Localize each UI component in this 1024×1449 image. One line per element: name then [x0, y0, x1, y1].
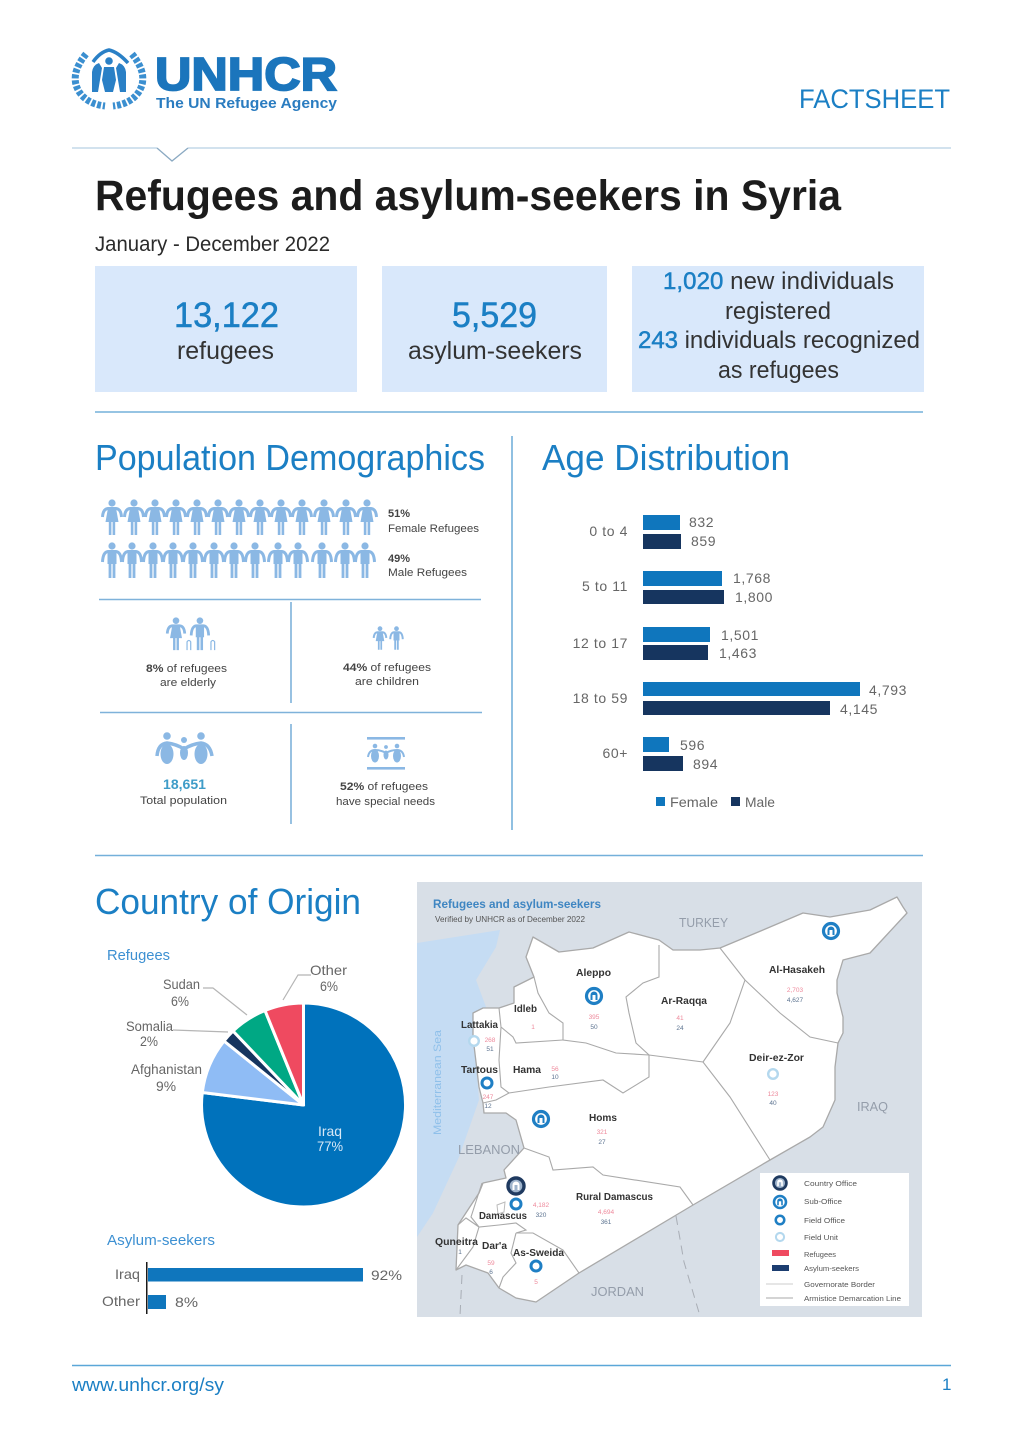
chart legend: Male	[745, 794, 775, 810]
footer url: www.unhcr.org/sy	[71, 1375, 224, 1395]
map: country labels	[432, 915, 888, 1299]
bar chart: age groups: 1,768	[733, 570, 771, 586]
pie chart: refugees by origin: 9%	[156, 1078, 176, 1094]
special needs share	[336, 781, 436, 808]
map land: Syria	[456, 897, 907, 1302]
map: governorate figures: 50	[590, 1024, 598, 1031]
map: governorate labels: Rural Damascus	[576, 1192, 653, 1203]
bar chart: age groups: 0 to 4	[589, 523, 628, 539]
map: country labels: JORDAN	[591, 1284, 644, 1299]
map legend: Sub-Office	[804, 1197, 842, 1206]
bar chart: age groups: 1,463	[719, 645, 757, 661]
map: governorate figures: 268	[485, 1037, 496, 1044]
map: governorate labels: Al-Hasakeh	[769, 965, 825, 976]
map: governorate figures: 361	[601, 1219, 612, 1226]
map: governorate figures: 4,627	[787, 997, 804, 1004]
map: governorate figures: 41	[676, 1015, 684, 1022]
bar chart: age groups: 4,793	[869, 682, 907, 698]
panel: registrations and recognitions: as refugees	[718, 357, 839, 384]
icon: children	[374, 626, 403, 650]
map: governorate figures: 247	[483, 1094, 494, 1101]
map: governorate figures: 1	[531, 1024, 535, 1031]
map: governorate figures: 51	[486, 1046, 494, 1053]
elderly share	[146, 663, 228, 689]
icon: family	[157, 732, 212, 764]
map: office markers	[469, 924, 838, 1271]
map: governorate labels: Damascus	[479, 1211, 527, 1222]
map legend: Field Unit	[804, 1233, 839, 1242]
bar chart: age groups: 12 to 17	[573, 635, 628, 651]
bar chart: age groups: 60+	[602, 745, 628, 761]
elderly share: are elderly	[160, 677, 217, 689]
bar chart: asylum-seekers by origin: Other	[102, 1293, 140, 1309]
heading: population demographics: Population Demographics	[95, 437, 485, 478]
map: governorate labels: Quneitra	[435, 1237, 478, 1248]
map title: Verified by UNHCR as of December 2022	[435, 914, 585, 924]
pie chart: refugees by origin: 6%	[320, 978, 338, 994]
map: governorate figures: 4,182	[533, 1202, 550, 1209]
map: governorate figures: 395	[589, 1014, 600, 1021]
map: governorate figures: 12	[484, 1103, 492, 1110]
total population: Total population	[140, 795, 227, 807]
bar chart: asylum-seekers by origin: 92%	[371, 1267, 402, 1283]
bar chart: asylum-seekers by origin: Iraq	[115, 1266, 140, 1282]
special needs share: 52% of refugees	[340, 781, 429, 793]
map: governorate labels	[435, 965, 825, 1259]
elderly share: 8% of refugees	[146, 663, 228, 675]
map sea	[417, 930, 500, 1237]
bar chart: age groups: 832	[689, 514, 714, 530]
icon: UNHCR emblem	[75, 50, 143, 106]
total population	[140, 776, 227, 807]
bar chart: age groups: 1,501	[721, 627, 759, 643]
total population: 18,651	[163, 776, 206, 792]
map: governorate figures: 27	[598, 1139, 606, 1146]
subheading: asylum-seekers: Asylum-seekers	[107, 1233, 215, 1249]
male share: Male Refugees	[388, 567, 468, 579]
pie chart: refugees by origin: Iraq	[318, 1123, 342, 1139]
bar chart: age groups	[573, 514, 907, 772]
title: Refugees and asylum-seekers in Syria	[95, 172, 842, 220]
icons: female refugees row	[102, 499, 376, 535]
logo wordmark: UNHCR	[155, 48, 337, 100]
pie chart: refugees by origin: Afghanistan	[131, 1061, 202, 1077]
panel: registrations and recognitions: registered	[725, 298, 831, 325]
bar chart: age groups: 859	[691, 533, 716, 549]
map: governorate figures: 4,694	[598, 1209, 615, 1216]
map: country labels: Mediterranean Sea	[432, 1029, 444, 1135]
panel: refugees count: refugees	[177, 337, 274, 365]
map: governorate figures: 321	[597, 1129, 608, 1136]
map: governorate labels: As-Sweida	[513, 1248, 564, 1259]
bar chart: age groups: 596	[680, 737, 705, 753]
footer	[71, 1366, 951, 1395]
icon: elderly	[167, 617, 215, 650]
children share	[343, 662, 432, 688]
map: country labels: LEBANON	[458, 1142, 520, 1157]
bar chart: asylum-seekers by origin: 8%	[175, 1294, 198, 1310]
map: governorate labels: Idleb	[514, 1004, 537, 1015]
pie chart: refugees by origin: 6%	[171, 993, 189, 1009]
page number: 1	[942, 1375, 951, 1394]
map: governorate labels: Ar-Raqqa	[661, 996, 707, 1007]
panel: country of origin	[95, 881, 406, 1314]
bar chart: age groups: 1,800	[735, 589, 773, 605]
header with logo and factsheet label	[72, 48, 951, 161]
map: governorate figures: 59	[487, 1260, 495, 1267]
map: governorate labels: Dar'a	[482, 1241, 507, 1252]
pie chart: refugees by origin: Sudan	[163, 976, 200, 992]
icons: male refugees row	[102, 542, 374, 578]
map: governorate figures: 24	[676, 1025, 684, 1032]
male share: 49%	[388, 553, 410, 565]
map legend: Refugees	[804, 1250, 836, 1259]
male share	[388, 553, 468, 579]
map legend: Governorate Border	[804, 1280, 876, 1289]
map: governorate figures: 5	[534, 1279, 538, 1286]
subheading: refugees: Refugees	[107, 948, 170, 964]
children share: are children	[355, 676, 419, 688]
map: governorate figures: 320	[536, 1212, 547, 1219]
female share	[388, 508, 480, 535]
panel: asylum-seekers count: 5,529	[452, 296, 537, 335]
map legend: Asylum-seekers	[804, 1264, 859, 1273]
pie chart: refugees by origin: 2%	[140, 1033, 158, 1049]
icon: special needs	[367, 737, 405, 770]
map legend: Field Office	[804, 1216, 845, 1225]
map: governorate figures	[458, 987, 804, 1286]
panel: population demographics	[95, 437, 485, 824]
chart legend: Female	[670, 794, 718, 810]
bar chart: age groups: 5 to 11	[582, 578, 628, 594]
map: country labels: TURKEY	[679, 915, 728, 930]
female share: 51%	[388, 508, 410, 520]
map title	[433, 897, 601, 924]
bar chart: age groups: 894	[693, 756, 718, 772]
map: governorate figures: 6	[489, 1269, 493, 1276]
factsheet label: FACTSHEET	[799, 84, 950, 114]
map: governorate labels: Hama	[513, 1065, 541, 1076]
map: governorate labels: Lattakia	[461, 1020, 498, 1031]
panel: refugees count	[95, 266, 357, 392]
map: governorate figures: 1	[458, 1249, 462, 1256]
map: governorate figures: 40	[769, 1100, 777, 1107]
map: governorate figures: 2,703	[787, 987, 804, 994]
special needs share: have special needs	[336, 796, 436, 808]
map: governorate labels: Homs	[589, 1113, 617, 1124]
female share: Female Refugees	[388, 523, 480, 535]
map: governorate figures: 10	[551, 1074, 559, 1081]
panel: registrations and recognitions: 1,020 new individuals	[663, 268, 894, 295]
heading: age distribution: Age Distribution	[542, 437, 790, 478]
bar chart: age groups: 4,145	[840, 701, 878, 717]
map: governorate figures: 56	[551, 1066, 559, 1073]
bar chart: age groups: 18 to 59	[573, 690, 628, 706]
map: refugees and asylum-seekers by governorate	[417, 882, 922, 1317]
panel: asylum-seekers count: asylum-seekers	[408, 337, 582, 365]
pie chart: refugees by origin: 77%	[317, 1138, 343, 1154]
map: governorate labels: Aleppo	[576, 968, 611, 979]
pie chart: refugees by origin: Other	[310, 962, 347, 978]
heading: country of origin: Country of Origin	[95, 881, 361, 922]
pie chart: refugees by origin: Somalia	[126, 1018, 173, 1034]
logo tagline: The UN Refugee Agency	[156, 95, 338, 112]
children share: 44% of refugees	[343, 662, 432, 674]
panel: asylum-seekers count	[382, 266, 607, 392]
map title: Refugees and asylum-seekers	[433, 897, 601, 911]
map: governorate figures: 123	[768, 1091, 779, 1098]
chart legend	[656, 794, 775, 810]
panel: registrations and recognitions	[632, 266, 924, 392]
map: governorate labels: Tartous	[461, 1065, 498, 1076]
panel: refugees count: 13,122	[174, 296, 279, 335]
map: governorate labels: Deir-ez-Zor	[749, 1053, 804, 1064]
pie chart: refugees by origin	[126, 962, 406, 1207]
panel: age distribution	[542, 437, 907, 810]
map legend	[760, 1173, 909, 1306]
map: country labels: IRAQ	[857, 1099, 888, 1114]
bar chart: asylum-seekers by origin	[102, 1262, 402, 1314]
map legend: Country Office	[804, 1179, 857, 1188]
date range: January - December 2022	[95, 233, 330, 256]
map legend: Armistice Demarcation Line	[804, 1294, 901, 1303]
panel: registrations and recognitions: 243 individuals recognized	[638, 327, 920, 354]
